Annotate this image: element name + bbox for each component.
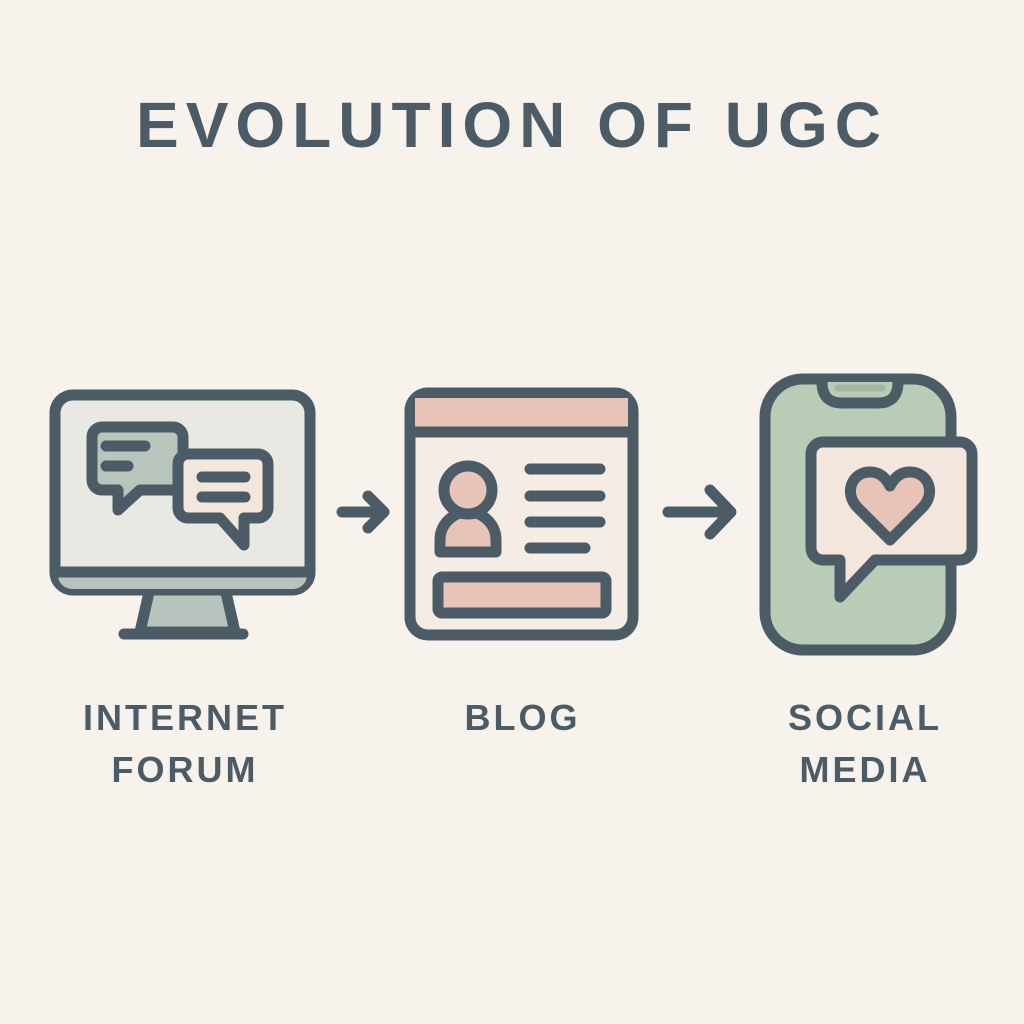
forum bubbles (92, 427, 268, 545)
label: blog: BLOG (464, 697, 580, 738)
label: social media: SOCIAL (788, 697, 942, 738)
icon: monitor with forum (55, 395, 310, 634)
label: internet forum: FORUM (112, 749, 258, 790)
avatar (440, 466, 496, 552)
label: social media: MEDIA (800, 749, 930, 790)
icon: blog page (410, 393, 633, 635)
label: internet forum (83, 697, 287, 790)
arrow 1 (342, 496, 384, 528)
icon: phone with like (765, 379, 972, 650)
label: social media (788, 697, 942, 790)
title: EVOLUTION OF UGC (136, 89, 888, 161)
arrow 2 (668, 490, 731, 534)
heart (850, 472, 930, 540)
label: internet forum: INTERNET (83, 697, 287, 738)
